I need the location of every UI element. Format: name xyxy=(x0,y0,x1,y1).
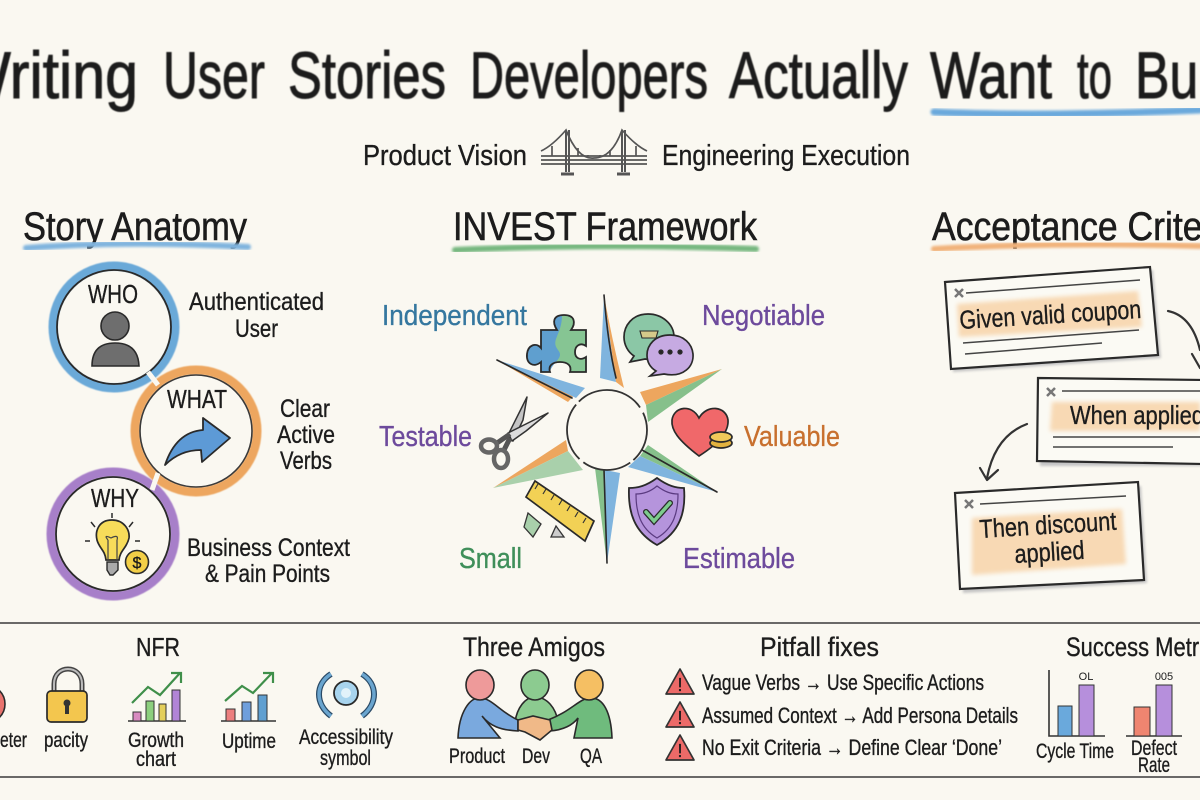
panel: acceptance criteria xyxy=(932,205,1200,593)
pitfall row 1: Vague Verbs → Use Specific Actions xyxy=(702,670,984,695)
arrow: when to then xyxy=(980,424,1027,480)
label: dev: Dev xyxy=(522,745,550,768)
title underline xyxy=(934,110,1200,114)
caption: clear active verbs: Active xyxy=(277,421,335,449)
chart: defect rate xyxy=(1126,671,1182,736)
label: accessibility symbol: Accessibility xyxy=(299,726,393,749)
pitfall row 2: Assumed Context → Add Persona Details xyxy=(702,703,1018,728)
subtitle: product vision: Product Vision xyxy=(363,140,527,172)
panel: story anatomy xyxy=(23,205,350,596)
panel: pitfall fixes xyxy=(666,632,1018,761)
label: defect rate xyxy=(1131,737,1177,777)
label: growth chart: chart xyxy=(136,748,176,771)
caption: clear active verbs: Clear xyxy=(280,395,330,423)
ring: why xyxy=(51,472,175,596)
star spikes xyxy=(493,295,722,563)
pitfall row 3: ! xyxy=(677,741,683,761)
label: product: Product xyxy=(449,745,505,768)
icon: lightbulb and coin xyxy=(85,513,148,575)
label: estimable: Estimable xyxy=(683,543,795,575)
label: testable: Testable xyxy=(379,421,472,453)
subtitle: engineering execution: Engineering Execution xyxy=(662,140,910,172)
panel: three amigos xyxy=(449,632,612,768)
icon: padlock xyxy=(47,669,87,722)
caption: business context: & Pain Points xyxy=(205,560,330,588)
title: Stories xyxy=(288,38,446,112)
icon: ruler xyxy=(524,481,594,541)
heading: three amigos: Three Amigos xyxy=(463,632,605,662)
label: who: WHO xyxy=(88,279,138,309)
icon: growth chart xyxy=(128,673,186,721)
arrow: given to when xyxy=(1168,311,1200,368)
label: why: WHY xyxy=(91,483,139,513)
pitfall row 2: ! xyxy=(677,708,683,728)
caption: authenticated user: User xyxy=(235,315,278,343)
title: Want xyxy=(930,38,1052,112)
label: what: WHAT xyxy=(167,384,227,414)
label: independent: Independent xyxy=(382,300,527,332)
card: given: Given valid coupon xyxy=(959,294,1142,335)
label: small: Small xyxy=(459,543,522,575)
icon: shield xyxy=(629,478,684,545)
label: defect rate: Rate xyxy=(1138,754,1170,777)
panel: nfr xyxy=(0,632,393,771)
icon: arrow xyxy=(165,418,230,465)
caption: clear active verbs xyxy=(277,395,335,475)
pitfall row 1: ! xyxy=(677,675,683,695)
icon: accessibility symbol xyxy=(319,674,374,716)
caption: authenticated user xyxy=(189,288,324,343)
caption: business context: Business Context xyxy=(187,534,350,562)
heading underline xyxy=(934,245,1200,249)
panel: success metrics xyxy=(1036,632,1200,777)
label: growth chart xyxy=(128,729,184,771)
bottom strip frame xyxy=(0,623,1200,777)
heading: invest framework: INVEST Framework xyxy=(453,205,758,249)
chart: cycle time: OL xyxy=(1079,671,1093,683)
icon: bridge xyxy=(541,130,647,174)
label: uptime: Uptime xyxy=(222,730,276,753)
title: Actually xyxy=(729,38,908,112)
icon: uptime chart xyxy=(221,673,276,721)
caption: business context xyxy=(187,534,350,588)
icon: person xyxy=(92,312,139,366)
caption: clear active verbs: Verbs xyxy=(280,447,332,475)
card: then: applied xyxy=(1014,535,1085,569)
title xyxy=(0,38,1200,112)
label: growth chart: Growth xyxy=(128,729,184,752)
card: given xyxy=(945,267,1161,372)
panel: invest framework xyxy=(379,205,840,575)
icon: red gauge xyxy=(0,685,5,723)
heading: pitfall fixes: Pitfall fixes xyxy=(760,632,879,662)
title: User xyxy=(163,38,265,112)
caption: authenticated user: Authenticated xyxy=(189,288,324,316)
title: Developers xyxy=(470,38,708,112)
label: negotiable: Negotiable xyxy=(702,300,825,332)
card: when xyxy=(1037,378,1200,466)
ring: what xyxy=(135,370,257,492)
label: cycle time: Cycle Time xyxy=(1036,740,1114,763)
label: accessibility symbol xyxy=(299,726,393,770)
pitfall row 3: No Exit Criteria → Define Clear ‘Done’ xyxy=(702,735,1002,760)
label: defect rate: Defect xyxy=(1131,737,1177,760)
icon: heart with coins xyxy=(672,408,732,456)
icon: lightbulb and coin: $ xyxy=(133,555,142,572)
heading underline xyxy=(26,244,248,248)
ring: who xyxy=(53,266,175,388)
heading: story anatomy: Story Anatomy xyxy=(23,205,247,249)
pitfall row 1 xyxy=(666,669,984,695)
label: accessibility symbol: symbol xyxy=(320,747,371,770)
pitfall row 2 xyxy=(666,702,1018,728)
label: valuable: Valuable xyxy=(744,421,840,453)
title: to xyxy=(1077,38,1112,112)
heading underline xyxy=(455,246,756,250)
centre hub xyxy=(567,390,647,470)
icon: three people handshake xyxy=(458,670,612,740)
label: capacity: pacity xyxy=(44,729,88,752)
ring junctions xyxy=(148,372,158,490)
heading: nfr: NFR xyxy=(136,632,180,662)
card: then: Then discount xyxy=(979,506,1118,544)
chart: defect rate: 005 xyxy=(1155,671,1173,683)
card: then xyxy=(955,482,1147,593)
icon: scissors xyxy=(481,397,548,468)
icon: puzzle piece xyxy=(527,315,586,372)
label: qa: QA xyxy=(580,745,602,768)
chart: cycle time xyxy=(1049,670,1105,736)
icon: speech bubbles xyxy=(624,314,693,376)
label: meter: eter xyxy=(0,729,27,752)
